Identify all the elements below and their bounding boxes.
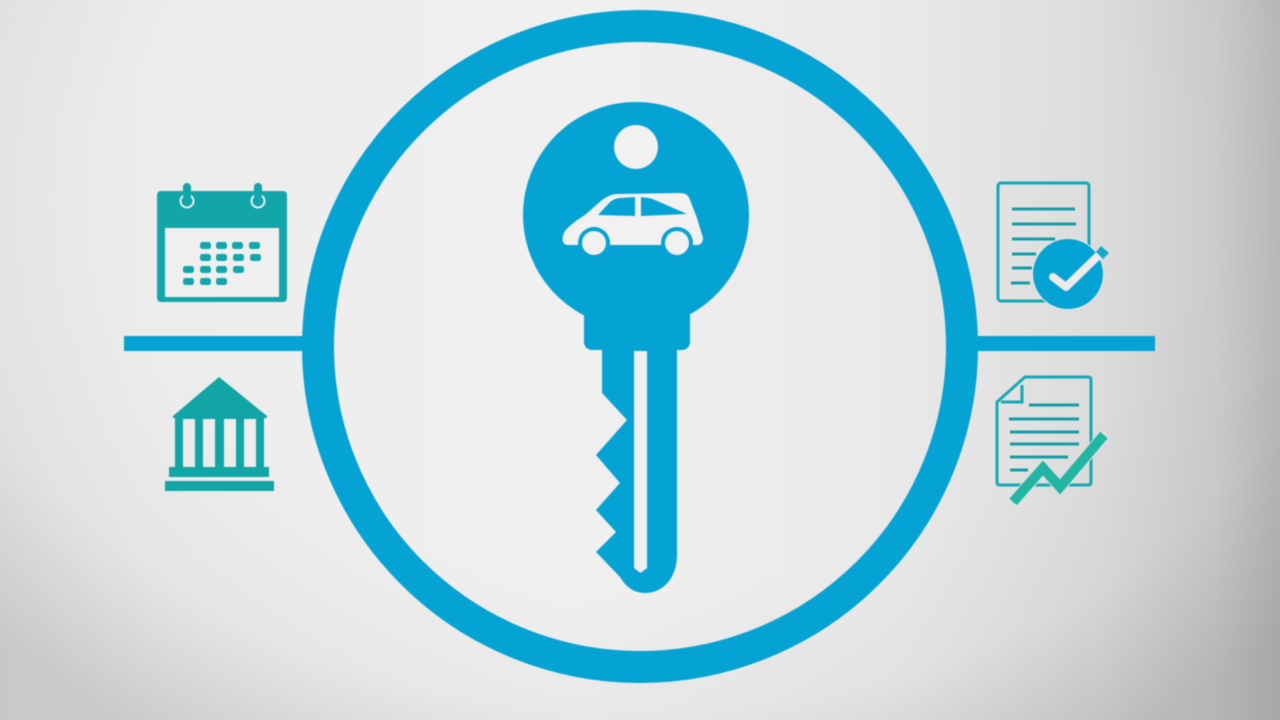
- bank lower step: [165, 481, 274, 491]
- bank upper step: [169, 467, 269, 477]
- key blade slot: [634, 351, 647, 573]
- icon: approved document: [998, 183, 1109, 310]
- right connector line: [976, 336, 1155, 351]
- growth trend line: [1012, 434, 1105, 503]
- car body: [563, 193, 703, 245]
- icon: document with growth arrow: [997, 377, 1105, 503]
- icon: bank: [165, 377, 274, 491]
- key head: [523, 102, 749, 328]
- document outline: [997, 377, 1091, 485]
- large ring: [318, 26, 962, 667]
- document outline: [998, 183, 1089, 301]
- left connector line: [124, 336, 304, 351]
- bank roof: [173, 377, 267, 418]
- car front wheel: [578, 227, 610, 259]
- check mark: [1053, 252, 1102, 287]
- key neck: [584, 300, 690, 350]
- car front window: [598, 197, 635, 216]
- car rear window: [641, 197, 687, 216]
- bank columns: [175, 417, 264, 468]
- calendar page: [165, 228, 279, 297]
- key hole: [614, 125, 658, 169]
- check tip: [1096, 246, 1109, 259]
- calendar rings: [180, 183, 264, 208]
- document text lines: [1009, 405, 1079, 470]
- car rear wheel: [661, 227, 693, 259]
- calendar frame: [157, 191, 287, 302]
- icon: car: [563, 193, 703, 259]
- key blade: [596, 345, 677, 593]
- icon: calendar: [157, 183, 287, 302]
- check badge: [1032, 238, 1104, 310]
- calendar dates: [183, 242, 261, 285]
- document fold: [1001, 385, 1022, 402]
- icon: car key: [523, 102, 749, 593]
- document text lines: [1011, 209, 1076, 283]
